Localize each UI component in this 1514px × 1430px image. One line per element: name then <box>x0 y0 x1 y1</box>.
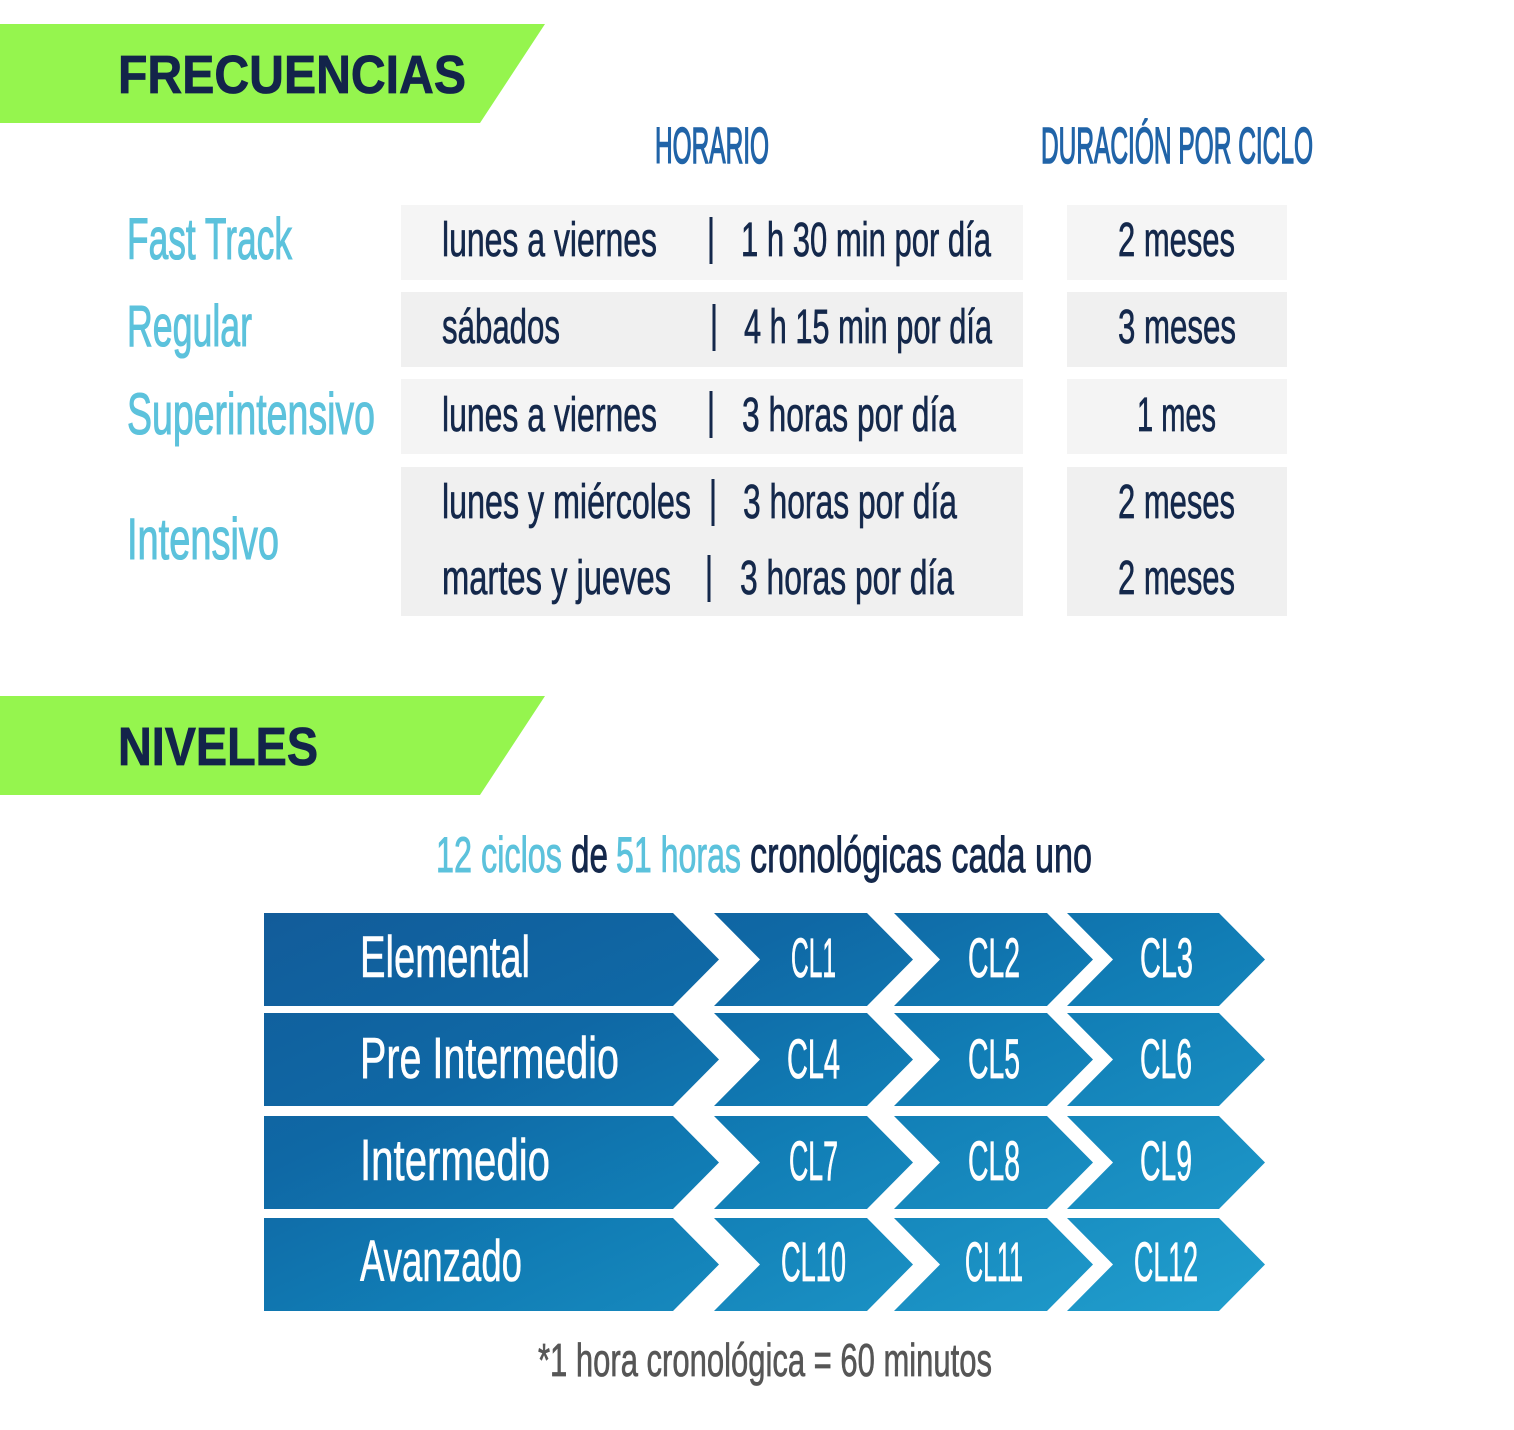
row: intensivo: Intensivo <box>127 507 279 572</box>
chevron row: avanzado: CL11 <box>965 1230 1023 1293</box>
footnote: *1 hora cronológica = 60 minutos <box>538 1334 992 1386</box>
chevron row: intermedio: CL7 <box>789 1129 838 1192</box>
heading banner: frecuencias: FRECUENCIAS <box>118 45 466 105</box>
row: intensivo: 3 horas por día <box>740 552 954 605</box>
row: superintensivo: lunes a viernes <box>442 389 657 442</box>
chevron row: avanzado: CL10 <box>781 1230 846 1293</box>
row: regular: 4 h 15 min por día <box>744 301 992 354</box>
row: intensivo: 2 meses <box>1118 476 1235 529</box>
row: superintensivo: 1 mes <box>1137 389 1216 442</box>
row: superintensivo: Superintensivo <box>127 382 375 447</box>
row: regular: sábados <box>442 301 560 354</box>
chevron row: elemental <box>264 913 1265 1006</box>
chevron row: elemental: CL1 <box>791 926 836 989</box>
row: superintensivo: 3 horas por día <box>742 389 956 442</box>
chevron row: intermedio: Intermedio <box>360 1128 550 1193</box>
row: intensivo <box>127 467 1287 616</box>
row: fast track <box>127 205 1287 280</box>
row: fast track: 2 meses <box>1118 214 1235 267</box>
row: intensivo: 3 horas por día <box>743 476 957 529</box>
row: fast track: lunes a viernes <box>442 214 657 267</box>
subtitle: 51 horas <box>616 827 741 883</box>
row: intensivo: 2 meses <box>1118 552 1235 605</box>
row: superintensivo <box>127 379 1287 454</box>
subtitle: 12 ciclos <box>436 827 562 883</box>
chevron row: avanzado: Avanzado <box>360 1229 522 1294</box>
section: niveles <box>0 696 1265 1386</box>
row: fast track: Fast Track <box>127 207 293 272</box>
chevron row: intermedio: CL8 <box>968 1129 1020 1192</box>
section: frecuencias <box>0 24 1313 616</box>
chevron row: intermedio <box>264 1116 1265 1209</box>
subtitle: cronológicas cada uno <box>750 827 1092 883</box>
row: intensivo: lunes y miércoles <box>442 476 691 529</box>
chevron row: elemental: Elemental <box>360 925 530 990</box>
chevron row: pre intermedio: CL6 <box>1140 1027 1192 1090</box>
chevron row: pre intermedio: Pre Intermedio <box>360 1026 619 1091</box>
row: regular: 3 meses <box>1118 301 1236 354</box>
heading banner: niveles: NIVELES <box>118 717 318 777</box>
row: regular <box>127 292 1287 367</box>
subtitle: de <box>571 827 608 883</box>
row: fast track: 1 h 30 min por día <box>741 214 991 267</box>
chevron row: intermedio: CL9 <box>1140 1129 1192 1192</box>
row: intensivo: martes y jueves <box>442 552 671 605</box>
chevron row: pre intermedio: CL5 <box>968 1027 1020 1090</box>
chevron row: elemental: CL2 <box>968 926 1020 989</box>
heading banner: frecuencias <box>0 24 545 123</box>
chevron row: elemental: CL3 <box>1140 926 1193 989</box>
chevron row: pre intermedio <box>264 1013 1265 1106</box>
chevron row: pre intermedio: CL4 <box>787 1027 840 1090</box>
chevron row: avanzado: CL12 <box>1134 1230 1198 1293</box>
chevron row: avanzado <box>264 1218 1265 1311</box>
section: frecuencias: HORARIO <box>655 117 769 174</box>
subtitle <box>436 827 1092 883</box>
row: regular: Regular <box>127 294 252 359</box>
heading banner: niveles <box>0 696 545 795</box>
